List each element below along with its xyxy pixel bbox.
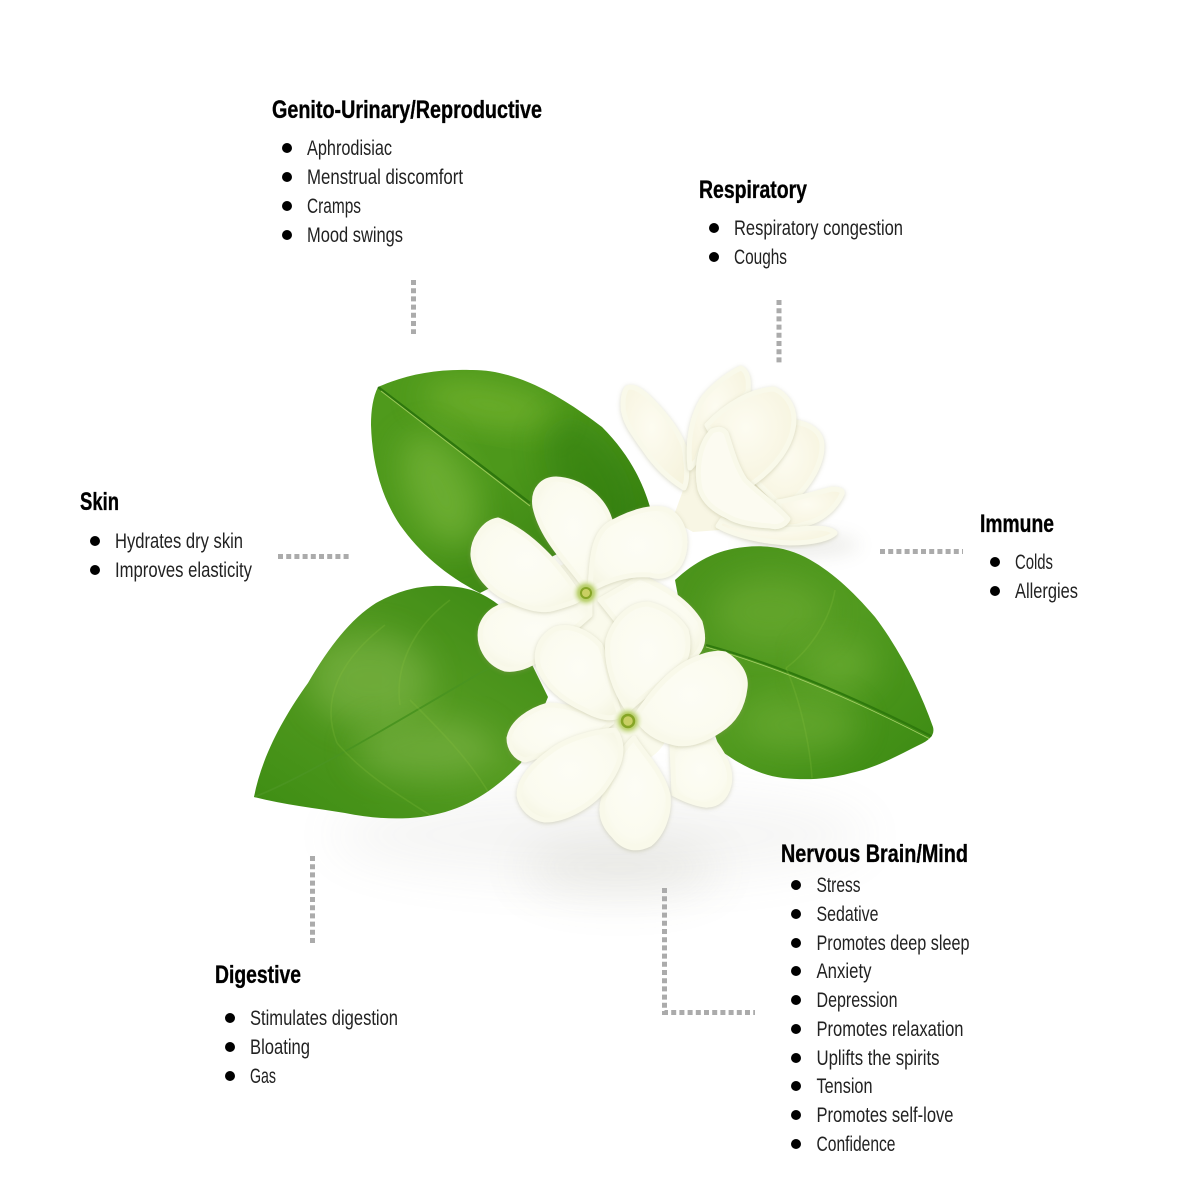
flower: half-open bud xyxy=(623,368,842,543)
list: nervous items: Tension xyxy=(816,1075,872,1098)
list: nervous items: Promotes deep sleep xyxy=(816,932,970,955)
section: Skin xyxy=(80,488,252,582)
connector: immune dotted line xyxy=(880,549,963,554)
heading: Nervous Brain/Mind: Nervous Brain/Mind xyxy=(781,840,968,868)
heading: Genito-Urinary/Reproductive: Genito-Urinary/Reproductive xyxy=(272,96,542,124)
list: immune items: Colds xyxy=(1015,551,1053,574)
list: genito-urinary items: Cramps xyxy=(307,195,361,218)
connector: respiratory dotted line xyxy=(776,300,782,363)
leaf: left xyxy=(254,586,548,818)
heading: Respiratory: Respiratory xyxy=(699,176,807,204)
list: respiratory items: Respiratory congestion xyxy=(734,217,903,240)
connector: genito-urinary dotted line xyxy=(411,280,416,334)
heading: Skin: Skin xyxy=(80,488,119,516)
list: digestive items: Stimulates digestion xyxy=(250,1007,398,1030)
list: nervous items: Depression xyxy=(816,989,898,1012)
flower centre: lower xyxy=(612,705,644,737)
flower: lower jasmine xyxy=(509,604,745,848)
bud base xyxy=(672,430,800,532)
leaf: right xyxy=(675,546,933,779)
list: nervous items: Sedative xyxy=(816,903,878,926)
flower centre: upper xyxy=(571,578,601,608)
list: genito-urinary items: Mood swings xyxy=(307,224,403,247)
lower flower base xyxy=(586,680,670,764)
section: Digestive xyxy=(215,961,398,1088)
list: skin items xyxy=(90,530,252,582)
section: Genito-Urinary/Reproductive xyxy=(272,96,542,247)
list: immune items: Allergies xyxy=(1015,580,1078,603)
section: Immune xyxy=(980,510,1078,603)
list: nervous items: Promotes relaxation xyxy=(816,1018,964,1041)
section: Nervous Brain/Mind xyxy=(781,840,970,1156)
list: skin items: Improves elasticity xyxy=(115,559,252,582)
list: digestive items: Gas xyxy=(250,1065,276,1088)
list: nervous items: Anxiety xyxy=(816,960,872,983)
list: respiratory items: Coughs xyxy=(734,246,787,269)
flower: upper jasmine xyxy=(473,479,703,669)
upper flower base xyxy=(528,560,668,661)
ground shadow xyxy=(330,533,870,894)
list: genito-urinary items: Aphrodisiac xyxy=(307,137,392,160)
list: genito-urinary items: Menstrual discomfort xyxy=(307,166,463,189)
list: nervous items: Confidence xyxy=(816,1133,896,1156)
leaf: top xyxy=(371,370,655,593)
list: digestive items: Bloating xyxy=(250,1036,310,1059)
connector: skin dotted line xyxy=(278,554,351,559)
list: genito-urinary items xyxy=(282,137,463,247)
list: immune items xyxy=(990,551,1078,603)
list: nervous items: Uplifts the spirits xyxy=(816,1047,940,1070)
list: skin items: Hydrates dry skin xyxy=(115,530,243,553)
heading: Digestive: Digestive xyxy=(215,961,301,989)
section: Respiratory xyxy=(699,176,903,269)
heading: Immune: Immune xyxy=(980,510,1054,538)
connector: digestive dotted line xyxy=(310,856,315,943)
illustration: jasmine flowers and leaves xyxy=(254,368,933,894)
list: digestive items xyxy=(225,1007,398,1088)
connector: nervous elbow dotted line xyxy=(664,888,755,1012)
list: nervous items xyxy=(791,874,970,1156)
list: nervous items: Promotes self-love xyxy=(816,1104,954,1127)
list: nervous items: Stress xyxy=(816,874,860,897)
list: respiratory items xyxy=(709,217,903,269)
